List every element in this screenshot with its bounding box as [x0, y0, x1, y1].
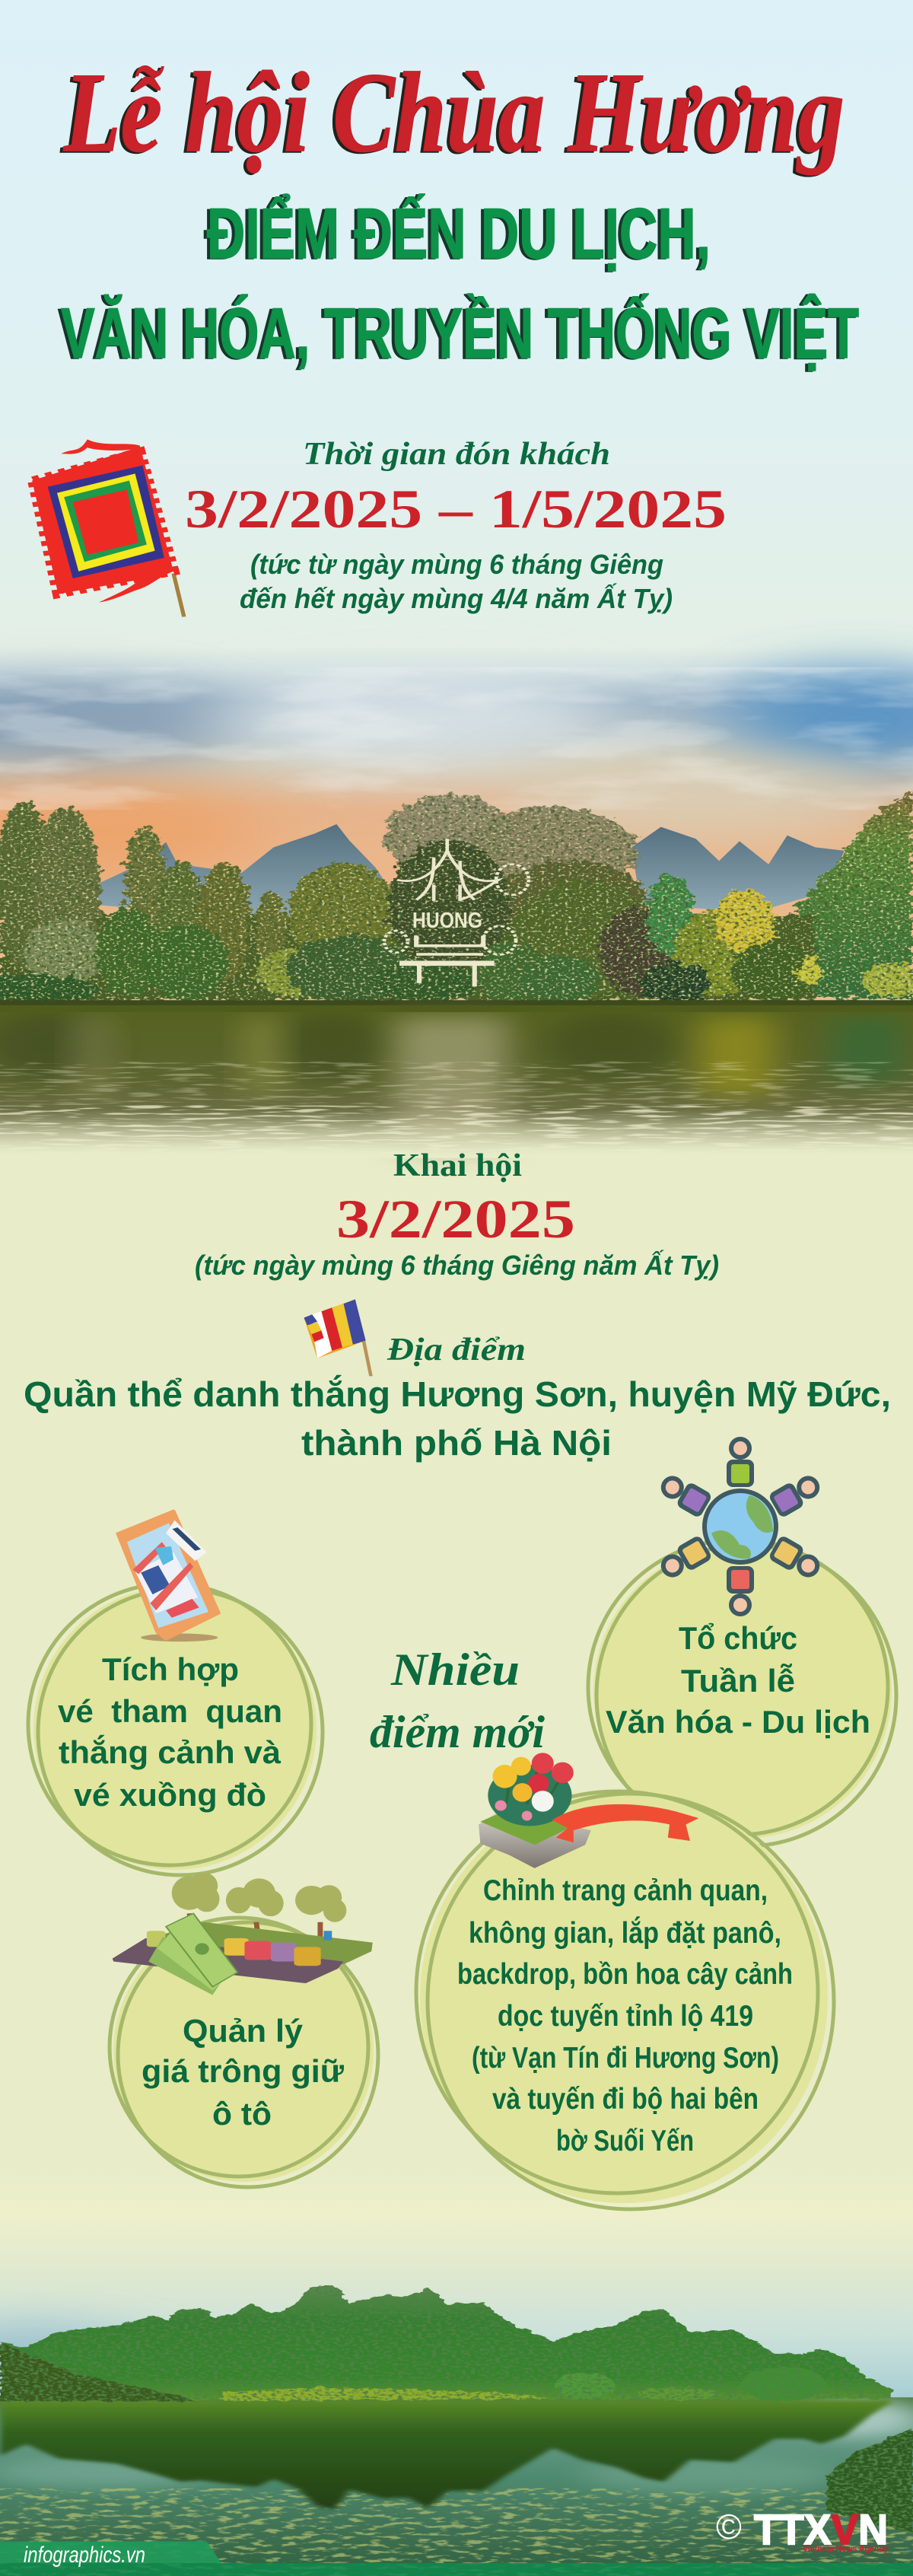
lunar date note: đến hết ngày mùng 4/4 năm Ất Tỵ): [240, 582, 673, 614]
culture week text: Tuần lễ: [681, 1662, 795, 1699]
shore: [0, 1000, 913, 1007]
heading: many new points: Nhiều: [390, 1645, 520, 1695]
circle: parking fee: [110, 1918, 378, 2187]
landscape text: bờ Suối Yến: [556, 2125, 694, 2157]
pagoda sign: [384, 839, 529, 986]
landscape text: backdrop, bồn hoa cây cảnh: [457, 1958, 793, 1991]
lakeside vegetation: [0, 2343, 913, 2533]
lake water: [0, 1005, 913, 1158]
mountains: [0, 2285, 891, 2401]
icon: festival flag: [32, 439, 184, 616]
photo: mountains reflected in lake: [0, 2169, 913, 2576]
location block: [24, 1333, 891, 1463]
underwater weeds: [0, 2488, 913, 2576]
parking text: ô tô: [212, 2096, 272, 2132]
landscape text: và tuyến đi bộ hai bên: [492, 2083, 759, 2116]
tickets text: thắng cảnh và: [59, 1734, 282, 1770]
subtitle: [61, 193, 859, 373]
culture week text: [606, 1620, 870, 1740]
right green hill: [797, 793, 913, 1000]
pagoda sign name: HUONG: [412, 909, 482, 933]
visiting time heading: Thời gian đón khách: [303, 437, 610, 472]
logo: TTXVN: ©: [716, 2507, 742, 2546]
heading: many new points: [370, 1645, 545, 1757]
culture week text: Tổ chức: [679, 1620, 797, 1656]
far mountains: [96, 824, 845, 919]
heading: many new points: điểm mới: [370, 1707, 545, 1757]
subtitle: ĐIỂM ĐẾN DU LỊCH,: [207, 193, 711, 273]
circle: culture and tourism week: [588, 1540, 896, 1846]
mountain reflection: [0, 2400, 891, 2509]
photo: Huong pagoda lake at sunset: [0, 647, 913, 1158]
landscape text: không gian, lắp đặt panô,: [469, 1916, 781, 1950]
visiting time block: [185, 437, 727, 614]
icon: globe with people: [656, 1437, 825, 1616]
source website: infographics.vn: [24, 2543, 145, 2568]
location text: Quần thể danh thắng Hương Sơn, huyện Mỹ Đức,: [24, 1374, 891, 1414]
circle: integrated tickets: [28, 1584, 323, 1875]
culture week text: Văn hóa - Du lịch: [606, 1704, 870, 1740]
landscape text: dọc tuyến tỉnh lộ 419: [498, 2000, 753, 2033]
parking text: [142, 2013, 345, 2132]
tickets text: vé xuồng đò: [74, 1777, 266, 1813]
circle: landscape improvements: [416, 1791, 834, 2209]
lunar date note: [240, 549, 673, 614]
icon: parking lot with trees and banknotes: [113, 1873, 373, 1995]
landscape text: (từ Vạn Tín đi Hương Sơn): [472, 2042, 779, 2074]
icon: flower bed with ribbon: [479, 1753, 698, 1868]
logo: TTXVN: TTXVN: [754, 2505, 888, 2553]
opening lunar note: (tức ngày mùng 6 tháng Giêng năm Ất Tỵ): [195, 1249, 719, 1281]
icon: phone with ticket: [118, 1511, 219, 1641]
tickets text: Tích hợp: [102, 1651, 239, 1687]
opening heading: Khai hội: [393, 1148, 522, 1183]
lake water: [0, 2397, 913, 2576]
visiting dates: 3/2/2025 – 1/5/2025: [185, 479, 727, 540]
parking text: Quản lý: [183, 2013, 304, 2049]
location heading: Địa điểm: [387, 1333, 526, 1368]
parking text: giá trông giữ: [142, 2053, 345, 2089]
tickets text: vé tham quan: [58, 1693, 282, 1729]
location text: thành phố Hà Nội: [301, 1423, 612, 1463]
tickets text: [58, 1651, 282, 1813]
location text: [24, 1374, 891, 1463]
lunar date note: (tức từ ngày mùng 6 tháng Giêng: [250, 549, 663, 580]
opening date: 3/2/2025: [336, 1189, 575, 1250]
bottom ribbon: [0, 2542, 913, 2576]
icon: Buddhist flag: [304, 1299, 371, 1376]
landscape text: [457, 1874, 793, 2157]
opening date block: [195, 1148, 719, 1281]
tree line: [0, 794, 913, 1005]
logo: TTXVN: Vietnam News Agency: [803, 2543, 888, 2554]
landscape text: Chỉnh trang cảnh quan,: [483, 1874, 768, 1907]
